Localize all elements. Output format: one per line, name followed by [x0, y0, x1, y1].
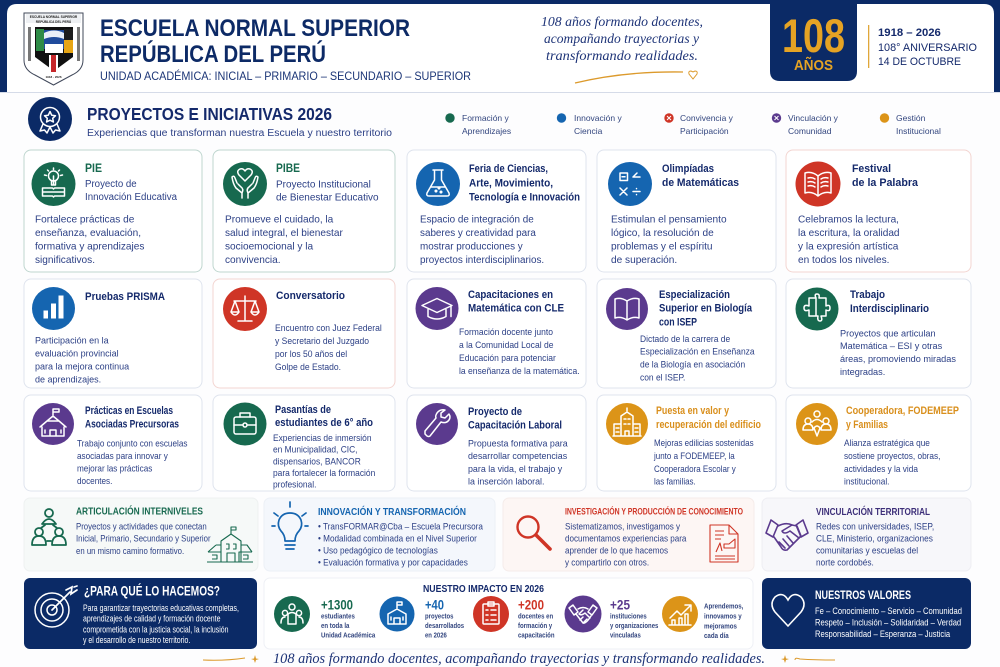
anniversary dates: 14 DE OCTUBRE [878, 56, 961, 68]
description: Proyectos y actividades que conectan [76, 521, 207, 532]
icon: puzzle [796, 288, 838, 330]
description: para la vida, el trabajo y [468, 464, 563, 474]
card: Cooperadora [786, 395, 971, 491]
description: norte cordobés. [816, 557, 874, 568]
footer motto: 108 años formando docentes, acompañando trayectorias y transformando realidades. [273, 651, 765, 667]
legend [445, 113, 941, 136]
heading [846, 405, 959, 431]
heading [850, 289, 929, 315]
description: integradas. [840, 367, 885, 377]
values list: Responsabilidad – Esperanza – Justicia [815, 628, 950, 639]
description: la inserción laboral. [468, 476, 544, 486]
heading: con ISEP [659, 316, 697, 328]
description: áreas, promoviendo miradas [840, 354, 956, 364]
description: Golpe de Estado. [275, 362, 341, 372]
heading: y Familias [846, 419, 888, 431]
section heading: PROYECTOS E INICIATIVAS 2026 [87, 104, 332, 124]
description: convivencia. [225, 255, 281, 266]
description: asociadas para innovar y [77, 450, 168, 461]
legend: Formación y [462, 113, 510, 123]
heading [852, 163, 919, 189]
heading: de la Palabra [852, 177, 919, 189]
legend: Innovación y [574, 113, 622, 123]
description: dispensarios, BANCOR [273, 456, 361, 467]
description: Alianza estratégica que [844, 438, 930, 448]
stat: mejora continua: innovamos y [704, 613, 742, 621]
heading: estudiantes de 6° año [275, 417, 373, 429]
description: Estimulan el pensamiento [611, 214, 727, 226]
legend: Comunidad [788, 126, 832, 136]
stat: estudiantes: +1300 [321, 598, 353, 612]
description: para fortalecer la formación [273, 468, 375, 478]
legend: Aprendizajes [462, 126, 511, 136]
description: Mejoras edilicias sostenidas [654, 438, 754, 448]
icon: light bulb [272, 502, 308, 549]
heading: Innovación Educativa [85, 192, 177, 203]
icon: report document [710, 525, 738, 562]
stat: proyectos [380, 596, 464, 640]
icon: scales [223, 287, 267, 331]
description: aprendizajes de calidad y formación docente [83, 614, 221, 624]
card: Prácticas en Escuelas [24, 395, 202, 491]
icon: graduation cap [416, 287, 458, 330]
description: formativa y aprendizajes [35, 242, 144, 252]
description: comprometida con la justicia social, la inclusión [83, 625, 229, 635]
stat: instituciones [564, 596, 659, 640]
legend: Institucional [896, 126, 941, 136]
stat: instituciones: instituciones [610, 613, 647, 621]
description: Trabajo conjunto con escuelas [77, 438, 188, 449]
description: aprender de lo que hacemos [565, 545, 668, 556]
panel: Innovación y Transformación [264, 498, 495, 571]
heading: de Matemáticas [662, 177, 739, 189]
heading: Prácticas en Escuelas [85, 405, 173, 417]
description: Proyectos que articulan [840, 328, 936, 339]
stat: docentes: formación y [518, 623, 552, 630]
handwritten motto: transformando realidades. [546, 49, 698, 64]
bullet list: • Modalidad combinada en el Nivel Superior [318, 533, 477, 544]
card: Festival de la Palabra [786, 150, 971, 272]
heading [276, 161, 379, 204]
description: salud integral, el bienestar [225, 228, 343, 239]
description: documentamos experiencias para [565, 533, 687, 544]
panel: Vinculación Territorial [762, 498, 971, 571]
values list: Respeto – Inclusión – Solidaridad – Verdad [815, 617, 961, 628]
legend: Ciencia [574, 126, 603, 136]
description: lógico, la resolución de [611, 228, 714, 239]
icon: magnifier [518, 516, 550, 549]
stat: mejora continua [662, 596, 744, 640]
heading [275, 404, 373, 429]
description: actividades y la vida [844, 464, 918, 474]
description: desarrollar competencias [468, 451, 568, 461]
anniversary dates [868, 25, 977, 68]
description: Para garantizar trayectorias educativas completas, [83, 603, 239, 613]
icon: community [796, 403, 838, 445]
header band [0, 0, 1000, 93]
bullet list: • Uso pedagógico de tecnologías [318, 545, 438, 556]
description: Fortalece prácticas de [35, 214, 135, 226]
heading: Interdisciplinario [850, 303, 929, 315]
legend: Vinculación y [788, 113, 839, 123]
description: junto a FODEMEEP, la [653, 451, 735, 461]
description: Formación docente junto [459, 327, 553, 337]
legend: Convivencia y [680, 113, 734, 123]
card: Puesta en valor [597, 395, 776, 491]
heading: Asociadas Precursoras [85, 418, 179, 430]
stat: proyectos: en 2026 [425, 632, 447, 640]
description: enseñanza, evaluación, [35, 228, 141, 239]
heading [662, 163, 739, 189]
description: y la expresión artística [798, 242, 899, 252]
description: en todos los niveles. [798, 255, 889, 266]
description: Redes con universidades, ISEP, [816, 521, 934, 532]
heading: NUESTROS VALORES [815, 588, 911, 602]
stat: proyectos: proyectos [425, 613, 454, 621]
description: comunitarias y escuelas del [816, 545, 918, 556]
108 años badge: 108 [782, 9, 845, 62]
stat: estudiantes [274, 596, 376, 640]
description: Dictado de la carrera de [640, 334, 730, 344]
icon: target with arrow [35, 586, 77, 627]
description: Promueve el cuidado, la [225, 214, 334, 226]
card: Olimpíadas [597, 150, 776, 272]
panel: Articulación Interniveles [24, 498, 258, 571]
description: sostiene proyectos, obras, [844, 451, 940, 461]
icon: heart in hands [223, 162, 267, 206]
panel: para qué lo hacemos [24, 578, 257, 649]
heading [468, 289, 564, 314]
description: Matemática – ESI y otras [840, 341, 943, 351]
description: CLE, Ministerio, organizaciones [816, 533, 933, 544]
legend: Gestión [896, 113, 926, 123]
heading: Arte, Movimiento, [469, 178, 553, 190]
description: proyectos interdisciplinarios. [420, 255, 544, 266]
heading [659, 289, 753, 328]
stat: mejora continua: Aprendemos, [704, 603, 744, 611]
heading: Feria de Ciencias, [469, 163, 548, 175]
heading: Proyecto de [468, 406, 522, 418]
description: significativos. [35, 255, 95, 266]
card: PIBE [213, 150, 395, 272]
heading [469, 163, 580, 204]
icon: book [606, 288, 648, 330]
description: y el desarrollo de nuestro territorio. [83, 635, 190, 645]
icon: math operators [608, 162, 652, 206]
stat: proyectos: desarrollados [425, 623, 464, 630]
school name title [100, 15, 410, 68]
description: Encuentro con Juez Federal [275, 323, 382, 333]
stat: mejora continua: cada día [704, 633, 729, 640]
panel: nuestros valores [762, 578, 971, 649]
stat: docentes: capacitación [518, 632, 555, 640]
heading: Capacitación Laboral [468, 420, 562, 432]
school crest logo: ESCUELA NORMAL SUPERIOR [30, 15, 78, 19]
description: Propuesta formativa para [468, 438, 568, 448]
bullet list: • TransFORMAR@Cba – Escuela Precursora [318, 521, 483, 532]
description: y compartirlo con otros. [565, 557, 649, 568]
heading [85, 161, 177, 203]
heading [85, 405, 179, 430]
card: Pasantías [213, 395, 395, 491]
icon: flask [416, 162, 460, 206]
description: Celebramos la lectura, [798, 214, 899, 226]
description: y Secretario del Juzgado [275, 336, 369, 346]
icon: open book [796, 162, 840, 206]
school crest logo [24, 13, 83, 85]
card: PIE [24, 150, 202, 272]
description: Especialización en Enseñanza [640, 346, 755, 357]
stat: proyectos: +40 [425, 598, 444, 612]
description: Sistematizamos, investigamos y [565, 521, 681, 532]
description: en Municipalidad, CIC, [273, 444, 358, 455]
card: Feria de Ciencias [407, 150, 586, 272]
description: Inicial, Primario, Secundario y Superior [76, 533, 211, 544]
heading: Cooperadora, FODEMEEP [846, 405, 959, 417]
heading: PIE [85, 161, 102, 175]
description: con el ISEP. [640, 372, 685, 383]
heading: VINCULACIÓN TERRITORIAL [816, 505, 930, 518]
description: mejorar las prácticas [77, 463, 153, 474]
handwritten motto: acompañando trayectorias y [544, 32, 700, 47]
card: Especialización [597, 279, 776, 388]
description: la enseñanza de la matemática. [459, 366, 580, 376]
description: saberes y creatividad para [420, 228, 536, 239]
description: Experiencias de inmersión [273, 433, 372, 443]
description: de la Biología en asociación [640, 359, 745, 370]
card: Pruebas PRISMA [24, 279, 202, 388]
stat: mejora continua: mejoramos [704, 623, 737, 631]
school crest logo: REPÚBLICA DEL PERÚ [36, 19, 72, 24]
description: Cooperadora Escolar y [654, 464, 737, 474]
description: socioemocional y la [225, 242, 313, 252]
stat: estudiantes: estudiantes [321, 613, 355, 621]
icon: wrench [416, 403, 458, 445]
icon: building [606, 403, 648, 445]
heading: Capacitaciones en [468, 289, 553, 301]
anniversary dates: 108° ANIVERSARIO [878, 42, 977, 54]
card: Capacitaciones [407, 279, 586, 388]
stat: estudiantes: en toda la [321, 623, 350, 630]
description: a la Comunidad Local de [459, 340, 554, 350]
icon: network of people [32, 509, 66, 545]
heading: Especialización [659, 289, 730, 301]
heading: Pruebas PRISMA [85, 291, 165, 303]
heading: NUESTRO IMPACTO EN 2026 [423, 583, 544, 595]
school name title: REPÚBLICA DEL PERÚ [100, 40, 326, 68]
bullet list: • Evaluación formativa y por capacidades [318, 557, 468, 568]
panel: Investigación [503, 498, 754, 571]
card: Conversatorio [213, 279, 395, 388]
heading: recuperación del edificio [656, 419, 761, 431]
icon: heart [772, 595, 804, 626]
heading: Pasantías de [275, 404, 331, 416]
handwritten motto: 108 años formando docentes, [541, 15, 703, 30]
heading: PIBE [276, 161, 300, 175]
section icon: rosette [28, 97, 72, 141]
stat: docentes [473, 596, 555, 640]
icon: briefcase [224, 402, 266, 446]
icon: handshake [766, 520, 808, 550]
heading: Puesta en valor y [656, 405, 730, 417]
heading: Olimpíadas [662, 163, 714, 175]
heading: INNOVACIÓN Y TRANSFORMACIÓN [318, 505, 466, 518]
legend: Participación [680, 126, 729, 136]
values list: Fe – Conocimiento – Servicio – Comunidad [815, 605, 962, 616]
section heading [87, 104, 392, 139]
academic unit subtitle: UNIDAD ACADÉMICA: INICIAL – PRIMARIO – SECUNDARIO – SUPERIOR [100, 68, 471, 83]
heading: Proyecto Institucional [276, 179, 371, 191]
heading: ARTICULACIÓN INTERNIVELES [76, 504, 203, 518]
stat: instituciones: y organizaciones [610, 623, 659, 630]
school name title: ESCUELA NORMAL SUPERIOR [100, 15, 410, 42]
description: problemas y el espíritu [611, 242, 713, 252]
heading: Superior en Biología [659, 302, 753, 314]
icon: school [32, 403, 74, 445]
description: de aprendizajes. [35, 374, 101, 385]
description: mostrar producciones y [420, 241, 523, 253]
description: por los 50 años del [275, 349, 347, 359]
section heading: Experiencias que transforman nuestra Escuela y nuestro territorio [87, 128, 392, 139]
heading: Proyecto de [85, 179, 137, 190]
108 años badge: AÑOS [794, 56, 833, 74]
card: Trabajo Interdisciplinario [786, 279, 971, 388]
heading: Matemática con CLE [468, 302, 564, 314]
description: Educación para potenciar [459, 353, 556, 363]
handwritten motto [541, 15, 703, 83]
heading: Tecnología e Innovación [469, 192, 580, 204]
description: Participación en la [35, 335, 110, 346]
description: de superación. [611, 255, 677, 266]
description: profesional. [273, 479, 316, 490]
icon: bar chart [32, 287, 75, 330]
heading [656, 405, 761, 431]
heading: Trabajo [850, 289, 885, 301]
description: docentes. [77, 475, 112, 486]
heading: ¿PARA QUÉ LO HACEMOS? [84, 582, 220, 598]
stat: estudiantes: Unidad Académica [321, 632, 376, 640]
heading [468, 406, 562, 432]
description: para la mejora continua [35, 361, 130, 372]
108 años badge [770, 0, 857, 81]
heading: Festival [852, 163, 891, 175]
heading: Conversatorio [276, 290, 345, 302]
description: institucional. [844, 476, 889, 487]
heading: de Bienestar Educativo [276, 192, 379, 204]
description: las familias. [654, 476, 696, 487]
description: evaluación provincial [35, 348, 119, 359]
school crest logo: 1918 · 2026 [45, 75, 62, 79]
stat: instituciones: vinculadas [610, 632, 641, 640]
stat: instituciones: +25 [610, 598, 630, 612]
description: la escritura, la oralidad [798, 228, 900, 239]
card: Proyecto de Capacitación Laboral [407, 395, 586, 491]
panel: nuestro impacto [264, 578, 753, 649]
description: Espacio de integración de [420, 214, 534, 226]
description: en un mismo camino formativo. [76, 545, 184, 556]
icon: school building [207, 527, 253, 562]
stat: docentes: docentes en [518, 613, 553, 621]
heading: INVESTIGACIÓN Y PRODUCCIÓN DE CONOCIMIENTO [565, 506, 743, 518]
stat: docentes: +200 [518, 598, 544, 612]
icon: bulb on book [32, 162, 76, 206]
anniversary dates: 1918 – 2026 [878, 27, 941, 39]
